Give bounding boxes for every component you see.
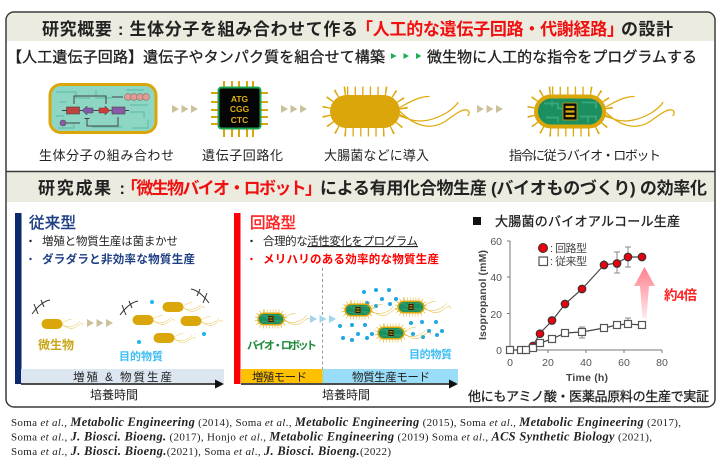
arrow: growth xyxy=(87,319,113,327)
heading: research results: 「微生物バイオ・ロボット」 xyxy=(121,179,322,198)
caption: robot: 指令に従うバイオ・ロボット xyxy=(509,148,661,163)
icon: gene circuit chip: ATG xyxy=(231,94,249,104)
bullet 2: ダラダラと非効率な物質生産 xyxy=(42,252,195,266)
line chart: 40 xyxy=(580,357,592,369)
panel: conventional type xyxy=(15,213,224,402)
overview heading: 「人工的な遺伝子回路・代謝経路」 xyxy=(356,20,624,39)
line chart: 0 xyxy=(507,357,513,369)
arrow: step 2 xyxy=(281,105,307,113)
label: about 4x: 約4倍 xyxy=(664,287,698,303)
overview heading xyxy=(42,20,673,39)
accent bar xyxy=(234,213,240,384)
references: Soma et al., Metabolic Engineering (2014), Soma et al., Metabolic Engineering (2015), Soma et al., Metabolic Engineering (2017), xyxy=(11,415,681,429)
line chart xyxy=(477,236,668,384)
bullet 1: 合理的な活性変化をプログラム xyxy=(263,234,418,248)
line chart: 40 xyxy=(490,272,502,284)
caption: introduction: 大腸菌などに導入 xyxy=(324,148,429,163)
icon: biomolecule circuit xyxy=(50,84,156,132)
references: Soma et al., J. Biosci. Bioeng.(2021), Soma et al., J. Biosci. Bioeng.(2022) xyxy=(11,444,391,458)
chart title: 大腸菌のバイオアルコール生産 xyxy=(495,214,680,229)
production mode band xyxy=(322,369,458,383)
arrow: step 1 xyxy=(172,105,198,113)
icon: gene circuit chip xyxy=(211,81,268,137)
arrow: mode switch xyxy=(310,315,336,323)
line chart: Time (h) xyxy=(566,372,608,384)
growth mode label: 増殖モード xyxy=(252,371,307,384)
chart note: 他にもアミノ酸・医薬品原料の生産で実証 xyxy=(468,389,709,404)
caption: circuit: 遺伝子回路化 xyxy=(202,148,283,163)
time axis xyxy=(241,383,450,385)
bullet 1: 増殖と物質生産は菌まかせ xyxy=(42,234,178,248)
accent bar xyxy=(15,213,22,384)
phase band xyxy=(21,369,224,383)
axis label: 培養時間 xyxy=(322,387,370,402)
overview heading: 研究概要 : 生体分子を組み合わせて作る xyxy=(42,20,358,39)
growth mode band xyxy=(241,369,322,383)
icon: gene circuit chip: CTC xyxy=(231,115,248,125)
label: bio robot: バイオ・ロボット xyxy=(247,339,317,352)
overview heading band xyxy=(7,13,714,41)
line chart: 60 xyxy=(490,236,502,248)
icon: E. coli xyxy=(329,94,469,130)
panel divider band xyxy=(7,172,714,202)
caption: combination: 生体分子の組み合わせ xyxy=(39,148,174,163)
panel: research overview xyxy=(7,13,714,163)
heading: research results: による有用化合物生産 (バイオものづくり) の効率化 xyxy=(320,179,707,198)
icon: gene circuit chip: CGG xyxy=(230,104,250,114)
illustration: robots xyxy=(257,288,451,342)
line chart: Isopropanol (mM) xyxy=(477,250,489,340)
chart legend: : 従来型 xyxy=(550,254,587,268)
axis label: 培養時間 xyxy=(90,387,138,402)
arrow: fold increase xyxy=(634,267,655,318)
line chart: 0 xyxy=(496,345,502,357)
panel: circuit type xyxy=(234,213,458,402)
type title: 回路型 xyxy=(250,214,296,232)
dashed divider xyxy=(322,268,324,370)
line chart: 20 xyxy=(490,309,502,321)
icon: bio robot xyxy=(534,94,674,130)
chart legend: : 回路型 xyxy=(550,241,587,255)
illustration: microbes xyxy=(32,289,222,344)
bullet 2: メリハリのある効率的な物質生産 xyxy=(263,252,439,266)
references xyxy=(11,415,681,458)
label: target product: 目的物質 xyxy=(119,349,163,363)
chart legend xyxy=(538,241,587,268)
line chart: 60 xyxy=(618,357,630,369)
overview heading: の設計 xyxy=(621,20,673,39)
heading: research results: 研究成果 : xyxy=(38,178,125,198)
panel: bio alcohol chart xyxy=(468,214,709,404)
subheading: artificial gene circuit: 【人工遺伝子回路】遺伝子やタンパク質を組合せて構築 xyxy=(7,48,385,66)
production mode label: 物質生産モード xyxy=(352,370,430,384)
line chart: 80 xyxy=(656,357,668,369)
chart title marker xyxy=(473,217,481,225)
label: target product: 目的物質 xyxy=(409,347,452,361)
label: microbe: 微生物 xyxy=(38,337,74,352)
references: Soma et al., J. Biosci. Bioeng. (2017), Honjo et al., Metabolic Engineering (2019) Soma et al., ACS Synthetic Biology (2021), xyxy=(11,430,652,444)
subheading: program instructions: 微生物に人工的な指令をプログラムする xyxy=(427,49,697,66)
type title: 従来型 xyxy=(29,214,76,232)
icon: green arrows xyxy=(391,53,422,59)
line chart: 20 xyxy=(542,357,554,369)
arrow: step 3 xyxy=(477,105,503,113)
phase label: 増殖 & 物質生産 xyxy=(73,370,172,384)
heading: research results xyxy=(38,178,707,198)
time axis xyxy=(21,383,216,385)
